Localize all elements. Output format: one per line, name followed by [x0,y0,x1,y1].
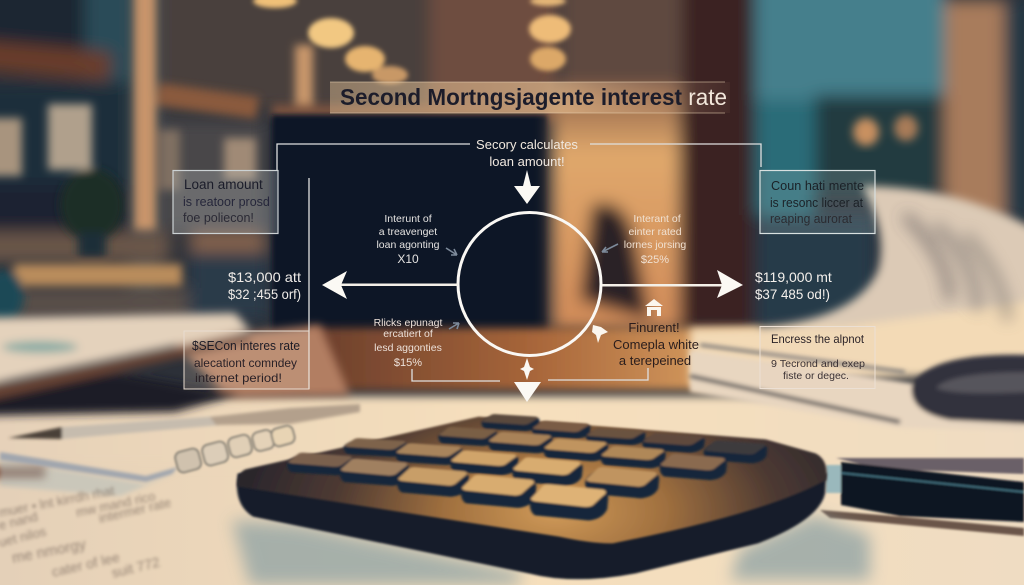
right arrow [602,270,743,298]
box: right lower [760,326,875,388]
label: upper right: lornes jorsing [624,239,686,251]
central circle [458,212,601,356]
label: upper right: einter rated [628,226,682,238]
left arrow [322,271,458,299]
box: right upper: is resonc liccer at [770,195,863,210]
pen and notebook [0,404,360,496]
box: right lower: Encress the alpnot [771,332,865,346]
table [310,328,760,390]
label: lower right: Comepla white [613,337,699,352]
right curved paper and binder [690,186,1024,430]
box: right lower: 9 Tecrond and exep [771,358,865,370]
small pointer arrows [446,244,618,329]
label: lower right [613,320,699,368]
calculator keys [287,414,767,520]
blurred document text: me nmorgy [11,536,88,567]
label: upper left: Interunt of [384,213,432,225]
label: upper left: X10 [397,252,419,266]
label: upper left: a treavenget [379,226,437,238]
box: right upper [760,170,875,234]
title band [330,82,730,113]
box: second interest rate: internet period! [195,371,282,385]
left amount: $32 ;455 orf) [228,286,301,302]
label: lower left: ercatiert of [383,328,433,340]
top arrow [514,170,540,204]
blurred document text: cater of lee [50,549,121,580]
box: right upper: Coun hati mente [771,178,864,193]
label: lower left [374,317,443,369]
right pen [820,458,1024,536]
icon: house [645,299,663,316]
blurred document text: muer • lnt kirrdh rhat [0,483,116,520]
calculator side [237,473,826,579]
blurred document text [0,483,172,581]
calculator top [237,417,827,543]
right amount: $37 485 od!) [755,286,830,302]
label: upper right: Interant of [633,213,681,225]
top label: loan amount! [489,154,565,169]
label: upper left: loan agonting [376,239,440,251]
label: lower left: lesd aggonties [374,342,442,354]
box: second interest rate: alecationt comndey [194,356,297,370]
connector lines [277,144,761,389]
spiral rings [174,424,296,474]
label: lower left: Rlicks epunagt [374,317,443,329]
icon: sparkle [592,325,608,343]
left amount: $13,000 att [228,269,301,285]
top label: Secory calculates [476,137,578,152]
box: second interest rate [184,331,309,389]
box: loan amount [173,170,278,234]
dark monitor [272,115,548,333]
box: second interest rate: $SECon interes rate [192,339,300,353]
label: upper right [624,213,686,266]
box: right upper: reaping aurorat [770,211,852,226]
box: loan amount: is reatoor prosd [183,195,270,209]
label: upper left [376,213,440,266]
blurred document text: suit 772 [110,553,162,581]
lower paper base [0,396,1024,585]
box: loan amount: foe poliecon! [183,211,254,225]
right amount [755,269,832,302]
box: right lower: fiste or degec. [783,370,849,382]
right amount: $119,000 mt [755,269,832,285]
ceiling lights [253,0,571,84]
calculator shadow [232,515,870,585]
label: lower right: a terepeined [619,353,691,368]
left amount [228,269,301,302]
title: Second Mortngsjagente interest rate [340,84,727,110]
label: upper right: $25% [641,254,669,266]
top label [476,137,578,169]
calculator [232,414,870,585]
blurred document text: intermer rate [97,495,172,526]
blurred document text: mw mand rico [75,488,157,520]
bottom markers [514,358,541,402]
box: loan amount: Loan amount [184,177,263,192]
label: lower right: Finurent! [628,320,680,335]
label: lower left: $15% [394,357,422,369]
